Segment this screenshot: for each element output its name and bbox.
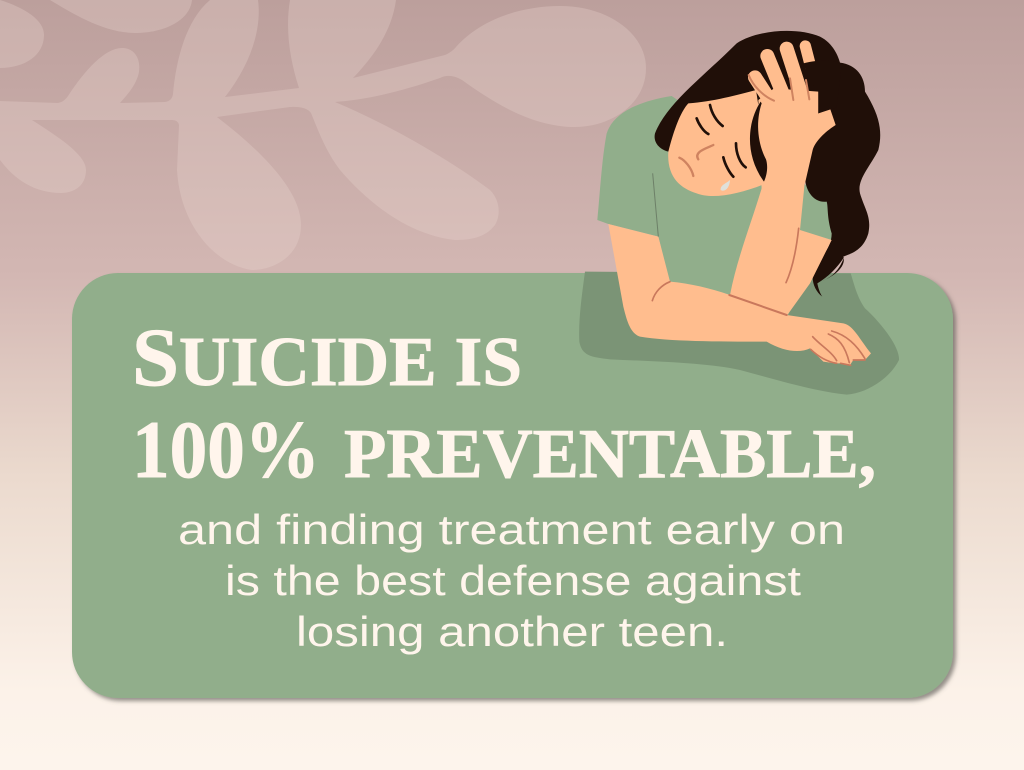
hair: [655, 31, 880, 297]
tear: [721, 180, 730, 191]
headline line 2: figure: 100%: [132, 404, 320, 495]
arm creases and hand lines: [652, 228, 865, 365]
finger outline: [749, 75, 809, 101]
palm: [758, 88, 836, 190]
supporting line 3: losing another teen.: [296, 608, 728, 655]
face: [668, 90, 770, 196]
headline line 1: SUICIDE IS: [132, 311, 522, 403]
green rounded panel: [72, 273, 953, 698]
decorative leaf branch: [0, 0, 646, 270]
supporting text: [178, 506, 845, 655]
raised arm: [730, 180, 832, 315]
headline: [132, 311, 876, 495]
fingers: [755, 46, 811, 108]
table shadow: [579, 272, 899, 395]
supporting line 2: is the best defense against: [225, 557, 801, 604]
headline line 2: word: PREVENTABLE,: [344, 416, 876, 493]
illustration: crying teen resting on table: [579, 31, 899, 395]
eyes, nose and mouth: [679, 105, 746, 177]
upper arm and forearm on table: [608, 224, 871, 365]
front hair lock: [750, 102, 767, 182]
supporting hand: [749, 46, 836, 190]
hair tuft above hand: [803, 60, 842, 113]
shirt fold line: [653, 173, 658, 237]
supporting line 1: and finding treatment early on: [178, 506, 845, 553]
green shirt: [597, 96, 832, 315]
